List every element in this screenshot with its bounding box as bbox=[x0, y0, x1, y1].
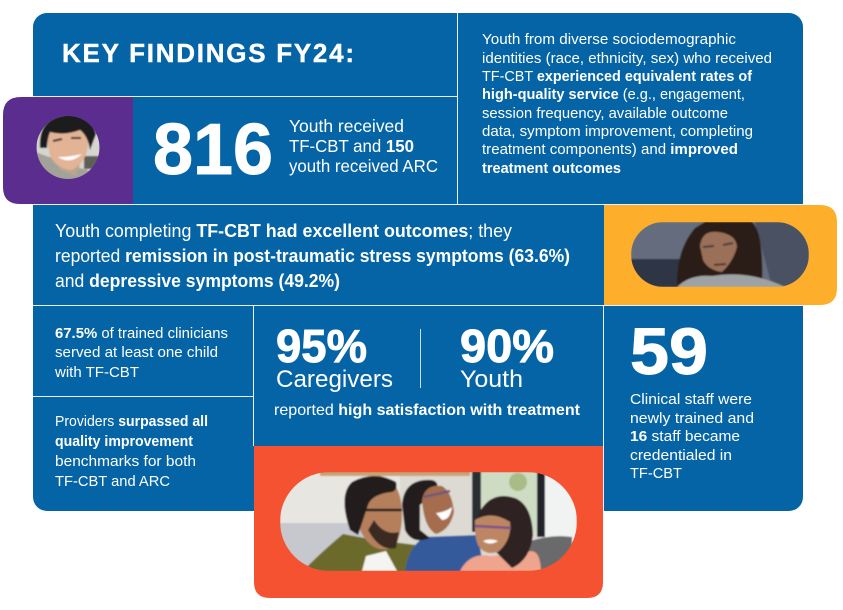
text block: quality benchmarks: quality improvement bbox=[55, 433, 193, 450]
text block: equivalent service: Youth from diverse sociodemographic bbox=[482, 31, 737, 48]
panel: yellow photo tile bbox=[604, 205, 837, 305]
woman bbox=[405, 535, 484, 571]
stat: 816 youth received: 816 bbox=[153, 110, 273, 190]
text block: quality benchmarks: TF-CBT and ARC bbox=[55, 473, 170, 490]
text block: equivalent service: data, symptom improvement, completing bbox=[482, 123, 753, 140]
text block: excellent outcomes: and depressive symptoms (49.2%) bbox=[55, 270, 340, 291]
stat: 59 clinical staff: TF-CBT bbox=[630, 465, 682, 482]
girl bbox=[460, 551, 541, 571]
text block: trained clinicians: 67.5% of trained clinicians bbox=[55, 325, 228, 342]
stat: 816 youth received: youth received ARC bbox=[289, 156, 438, 176]
text block: equivalent service: treatment outcomes bbox=[482, 160, 621, 177]
text block: equivalent service bbox=[482, 31, 772, 177]
dividers bbox=[33, 13, 803, 511]
stat: 59 clinical staff: 16 staff became bbox=[630, 428, 740, 445]
stat: 90% youth: Youth bbox=[460, 366, 523, 393]
man bbox=[303, 534, 416, 571]
text block: quality benchmarks: Providers surpassed all bbox=[55, 413, 208, 430]
stat: 59 clinical staff: newly trained and bbox=[630, 410, 754, 427]
stat: 95% caregivers: Caregivers bbox=[276, 366, 393, 393]
title: KEY FINDINGS FY24: bbox=[62, 38, 354, 68]
text block: equivalent service: identities (race, ethnicity, sex) who received bbox=[482, 50, 772, 67]
text block: equivalent service: high-quality service (e.g., engagement, bbox=[482, 86, 745, 103]
text block: equivalent service: session frequency, available outcome bbox=[482, 105, 728, 122]
text block: quality benchmarks bbox=[55, 413, 208, 490]
stat: 90% youth bbox=[460, 320, 554, 393]
text block: trained clinicians: served at least one child bbox=[55, 344, 218, 361]
stat: 816 youth received: TF-CBT and 150 bbox=[289, 136, 414, 156]
text block: excellent outcomes: reported remission in post-traumatic stress symptoms (63.6%) bbox=[55, 245, 570, 266]
stat: 816 youth received: Youth received bbox=[289, 116, 404, 136]
stat: 59 clinical staff bbox=[630, 314, 754, 482]
icon: photo of laughing family bbox=[280, 472, 577, 571]
icon: photo of pensive girl bbox=[631, 222, 809, 287]
divider bbox=[420, 329, 422, 388]
panel: blue background bbox=[33, 13, 803, 511]
text block: equivalent service: treatment components) and improved bbox=[482, 141, 738, 158]
stat: 816 youth received bbox=[153, 110, 438, 190]
caption: high satisfaction: reported high satisfaction with treatment bbox=[274, 402, 581, 419]
text block: excellent outcomes bbox=[55, 220, 570, 291]
text block: trained clinicians: with TF-CBT bbox=[54, 364, 139, 381]
stat: 90% youth: 90% bbox=[460, 320, 554, 372]
icon: photo of smiling boy bbox=[36, 115, 100, 180]
stat: 59 clinical staff: credentialed in bbox=[630, 447, 732, 464]
stat: 95% caregivers: 95% bbox=[276, 320, 367, 372]
text block: quality benchmarks: benchmarks for both bbox=[55, 453, 196, 470]
text block: trained clinicians bbox=[54, 325, 228, 381]
text block: excellent outcomes: Youth completing TF-CBT had excellent outcomes; they bbox=[55, 220, 513, 241]
panel: red-orange photo tile bbox=[254, 446, 603, 598]
stat: 95% caregivers bbox=[276, 320, 393, 393]
panel: purple photo tile bbox=[3, 97, 133, 204]
stat: 59 clinical staff: 59 bbox=[630, 314, 708, 388]
text block: equivalent service: TF-CBT experienced equivalent rates of bbox=[482, 68, 753, 85]
stat: 59 clinical staff: Clinical staff were bbox=[630, 391, 752, 408]
